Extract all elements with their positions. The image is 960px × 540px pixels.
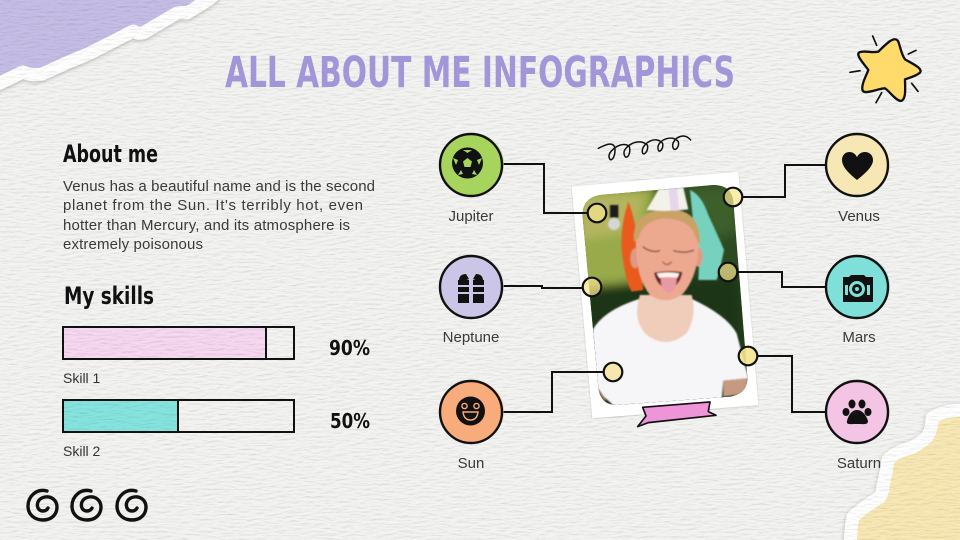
icon: star <box>850 36 921 103</box>
item: Mars <box>826 255 890 346</box>
label: Mars: Mars <box>842 329 876 346</box>
label: skill 2: Skill 2 <box>63 443 101 459</box>
torn paper corner: yellow <box>850 405 960 540</box>
text block: about me: Venus has a beautiful name and is the second <box>63 178 375 195</box>
photo <box>582 185 748 405</box>
text block: about me: extremely poisonous <box>63 236 203 253</box>
value: 90%: 90% <box>329 336 370 360</box>
squiggle decoration <box>598 136 691 160</box>
connector: Venus <box>742 165 826 197</box>
icon: spirals <box>28 490 146 520</box>
label: Sun: Sun <box>458 455 484 472</box>
icon: paw <box>842 400 872 424</box>
skill bar 2 <box>63 400 294 432</box>
connector: Mars <box>737 272 826 287</box>
item: Jupiter <box>440 133 504 225</box>
photo card <box>572 172 758 427</box>
ribbon <box>638 402 716 427</box>
connector: Jupiter <box>502 164 587 213</box>
label: Jupiter: Jupiter <box>448 208 494 225</box>
connector: Saturn <box>758 356 826 412</box>
item: Sun <box>440 380 504 472</box>
icon: heart <box>842 152 873 180</box>
label: Neptune: Neptune <box>443 329 499 346</box>
text block: about me <box>63 178 375 253</box>
label: Venus: Venus <box>838 208 880 225</box>
icon: smile <box>456 396 485 426</box>
text block: about me: planet from the Sun. It's terribly hot, even <box>63 197 363 214</box>
connector: Sun <box>502 372 603 412</box>
label: skill 1: Skill 1 <box>63 370 101 386</box>
label: Saturn: Saturn <box>837 455 881 472</box>
heading: about me: About me <box>63 140 158 168</box>
heading: my skills: My skills <box>64 282 154 310</box>
text block: about me: hotter than Mercury, and its atmosphere is <box>63 217 350 234</box>
photo nodes <box>583 188 757 381</box>
value: 50%: 50% <box>330 409 370 433</box>
item: Neptune <box>440 255 504 346</box>
item: Saturn <box>826 380 890 472</box>
icon: camera <box>843 275 873 302</box>
icon: football <box>452 148 483 178</box>
item: Venus <box>826 133 890 225</box>
skill bar 1 <box>63 327 294 359</box>
icon: gift <box>458 274 484 303</box>
title: ALL ABOUT ME INFOGRAPHICS <box>225 48 735 98</box>
connector: Neptune <box>502 286 583 288</box>
torn paper corner: purple <box>0 0 225 93</box>
